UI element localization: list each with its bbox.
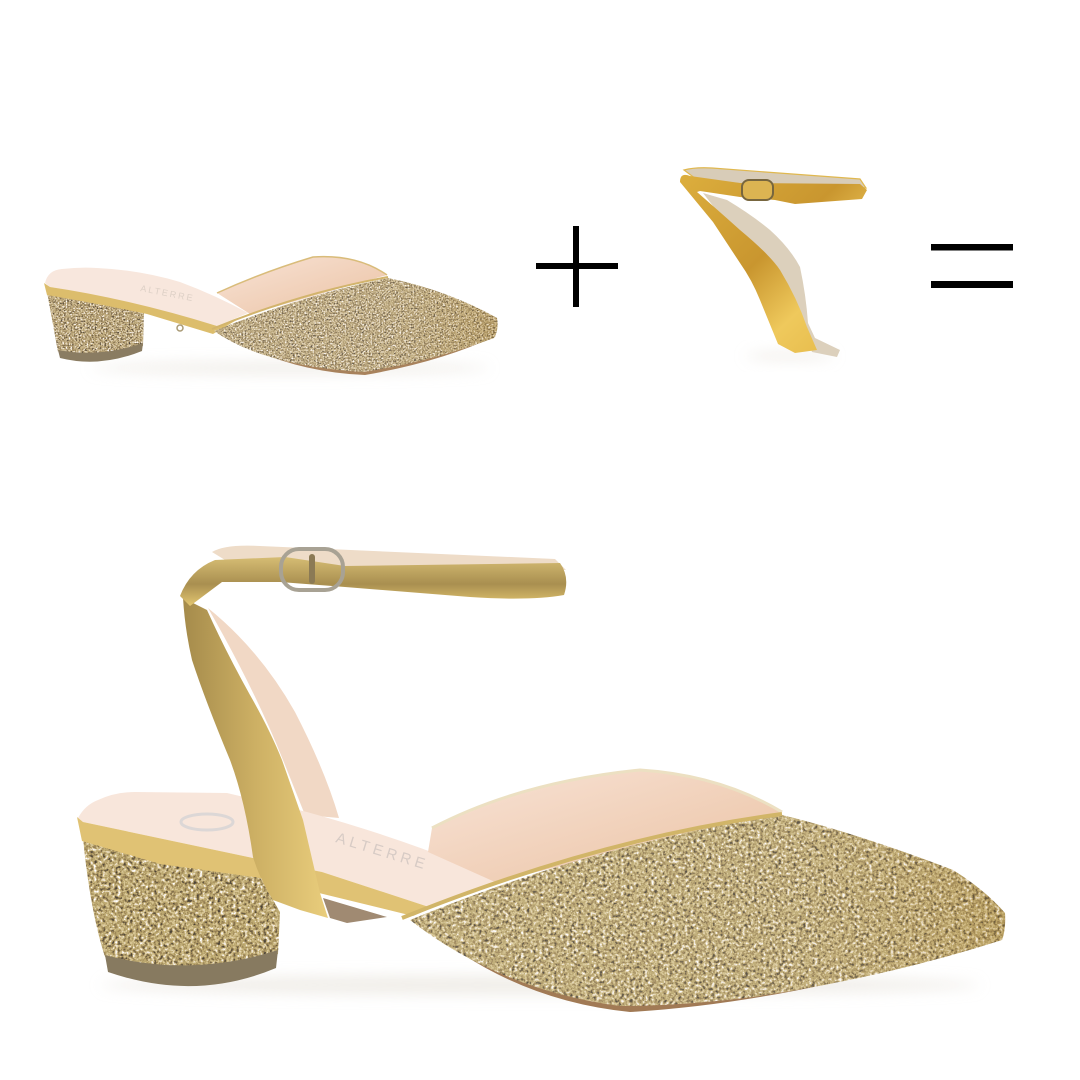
glitter upper <box>410 815 1005 1006</box>
top gold ankle strap <box>680 168 867 360</box>
mule gold rim <box>44 283 240 334</box>
mule small pin <box>177 325 183 331</box>
back strap lining <box>208 608 339 818</box>
vertical gold strap <box>183 598 328 918</box>
strap shadow <box>745 352 835 360</box>
under-sole brown piece <box>323 898 387 923</box>
upper tone <box>410 815 1005 1006</box>
insole logo mark <box>181 814 233 830</box>
buckle <box>281 549 343 590</box>
mule upper tone <box>214 278 498 372</box>
lining trim <box>432 770 782 828</box>
ankle strap front <box>180 557 566 606</box>
insole logo: ALTERRE <box>334 830 431 874</box>
mule back lining <box>217 257 387 314</box>
mule upper trim <box>212 277 388 329</box>
mule insole logo: ALTERRE <box>140 283 195 303</box>
plus sign <box>536 226 618 307</box>
shoe shadow <box>100 975 980 995</box>
strap descending lining <box>703 193 840 357</box>
block heel <box>83 838 280 970</box>
gold rim <box>77 817 432 916</box>
mule lining trim <box>217 257 387 293</box>
mule heel sole <box>58 343 143 362</box>
upper trim <box>402 814 782 918</box>
mule glitter upper <box>214 278 498 372</box>
inner lining <box>428 770 782 882</box>
mule heel <box>47 292 144 356</box>
strap gold band <box>680 175 867 353</box>
shoe insole <box>78 792 496 908</box>
ankle strap inner <box>212 546 566 570</box>
equals sign <box>931 244 1013 288</box>
heel sole <box>105 950 278 986</box>
strap buckle <box>742 180 773 200</box>
mule sole edge <box>225 336 496 375</box>
buckle pin <box>309 554 315 584</box>
bottom shoe: combined strapped shoe <box>77 546 1005 1012</box>
strap upper lining <box>684 168 866 188</box>
mule shadow <box>90 362 490 374</box>
mule insole <box>45 268 248 326</box>
sole edge <box>420 922 1004 1012</box>
top shoe: glitter mule <box>44 257 498 375</box>
